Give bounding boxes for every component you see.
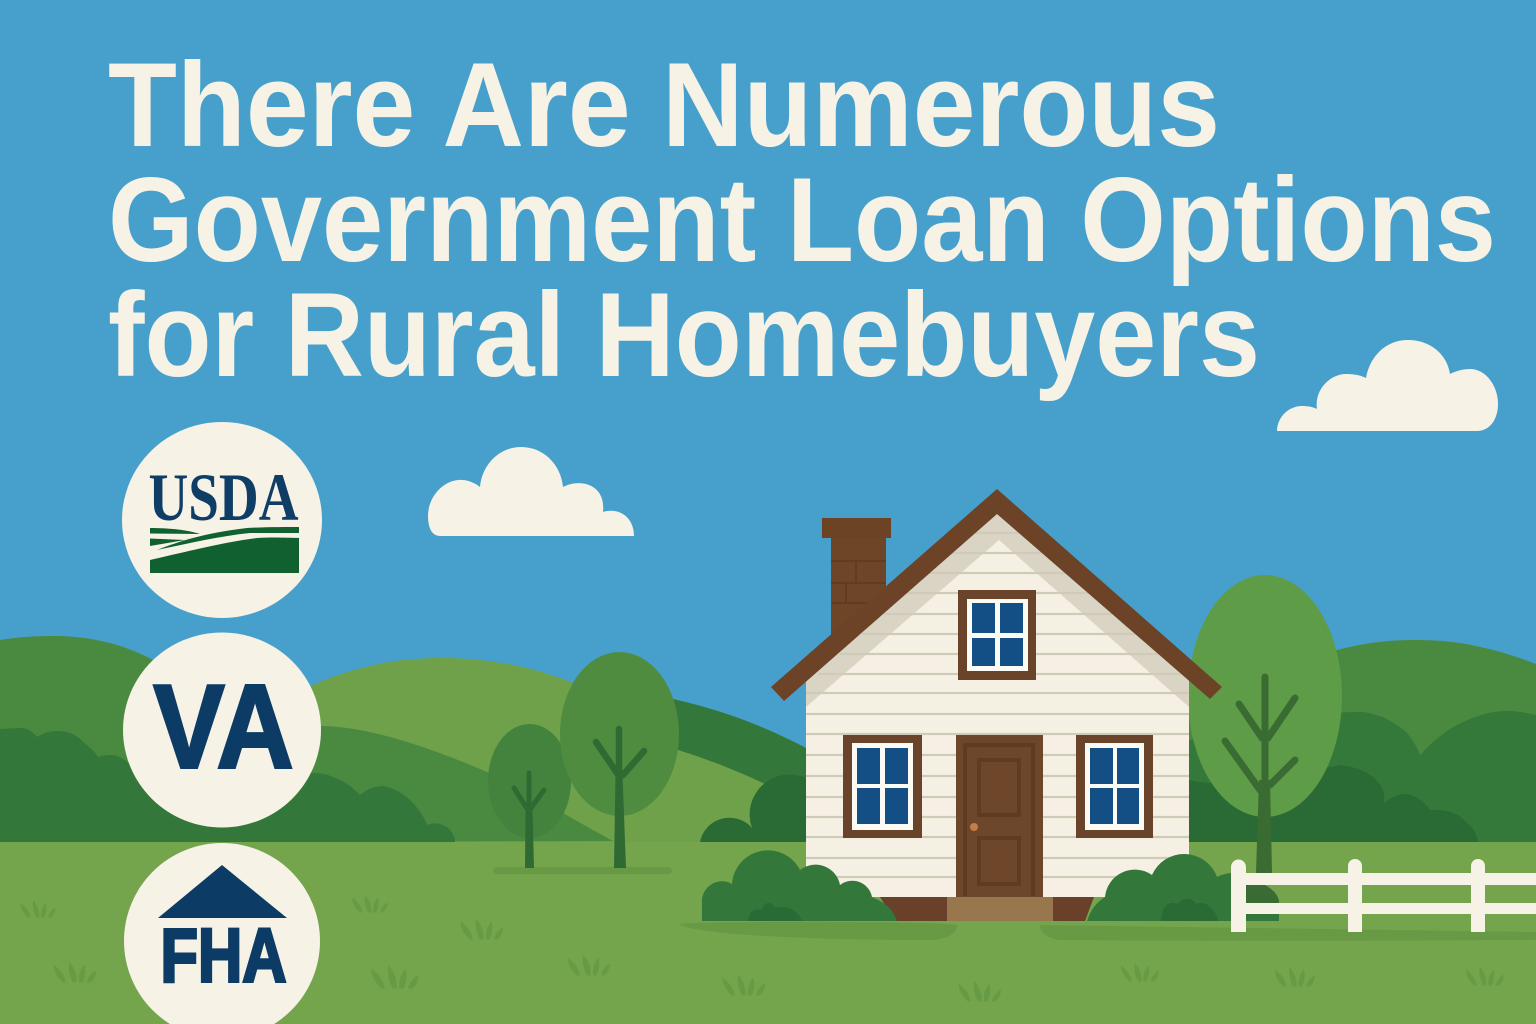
hills: left back xyxy=(0,636,320,842)
title: for Rural Homebuyers xyxy=(108,268,1260,402)
door xyxy=(956,735,1043,897)
bushes: beside house left xyxy=(700,775,806,842)
VA wordmark: VA xyxy=(154,660,294,794)
cloud: center xyxy=(428,447,634,536)
badge: VA xyxy=(123,632,321,828)
window: lower left xyxy=(843,735,922,838)
chimney xyxy=(822,518,891,648)
bushes: right dark xyxy=(1189,765,1478,842)
window: upper xyxy=(958,590,1036,680)
ground shadows xyxy=(493,867,1536,941)
cloud: upper right xyxy=(1277,340,1498,431)
window: lower right xyxy=(1076,735,1153,838)
FHA roof icon xyxy=(158,865,287,918)
bush: left of house xyxy=(702,850,897,921)
right tree xyxy=(1188,575,1342,873)
ground xyxy=(0,842,1536,1024)
bushes: left dark xyxy=(0,728,455,842)
hills: right mid xyxy=(1189,711,1536,842)
FHA wordmark: FHA xyxy=(160,914,286,998)
bush: right of house xyxy=(1087,854,1279,921)
hills: right back xyxy=(1189,640,1536,842)
front step xyxy=(947,897,1053,921)
grass tufts xyxy=(21,896,1503,1001)
house xyxy=(771,489,1222,921)
hills: left mid xyxy=(250,726,613,842)
wall xyxy=(806,514,1189,897)
hills: center light xyxy=(300,658,806,842)
siding lines xyxy=(806,533,1189,877)
badge: USDA xyxy=(122,422,322,618)
white fence xyxy=(1231,859,1536,932)
badge: FHA xyxy=(124,843,320,1024)
USDA landscape mark xyxy=(150,527,299,573)
tree: small left xyxy=(488,724,571,868)
title xyxy=(108,38,1496,402)
hills: center back dark xyxy=(640,690,806,842)
title: There Are Numerous xyxy=(108,38,1220,172)
USDA wordmark: USDA xyxy=(148,459,298,535)
roof xyxy=(771,489,1222,701)
roof shadow on wall xyxy=(806,514,1189,707)
tree: tall left xyxy=(560,652,679,868)
foundation xyxy=(880,897,1094,921)
